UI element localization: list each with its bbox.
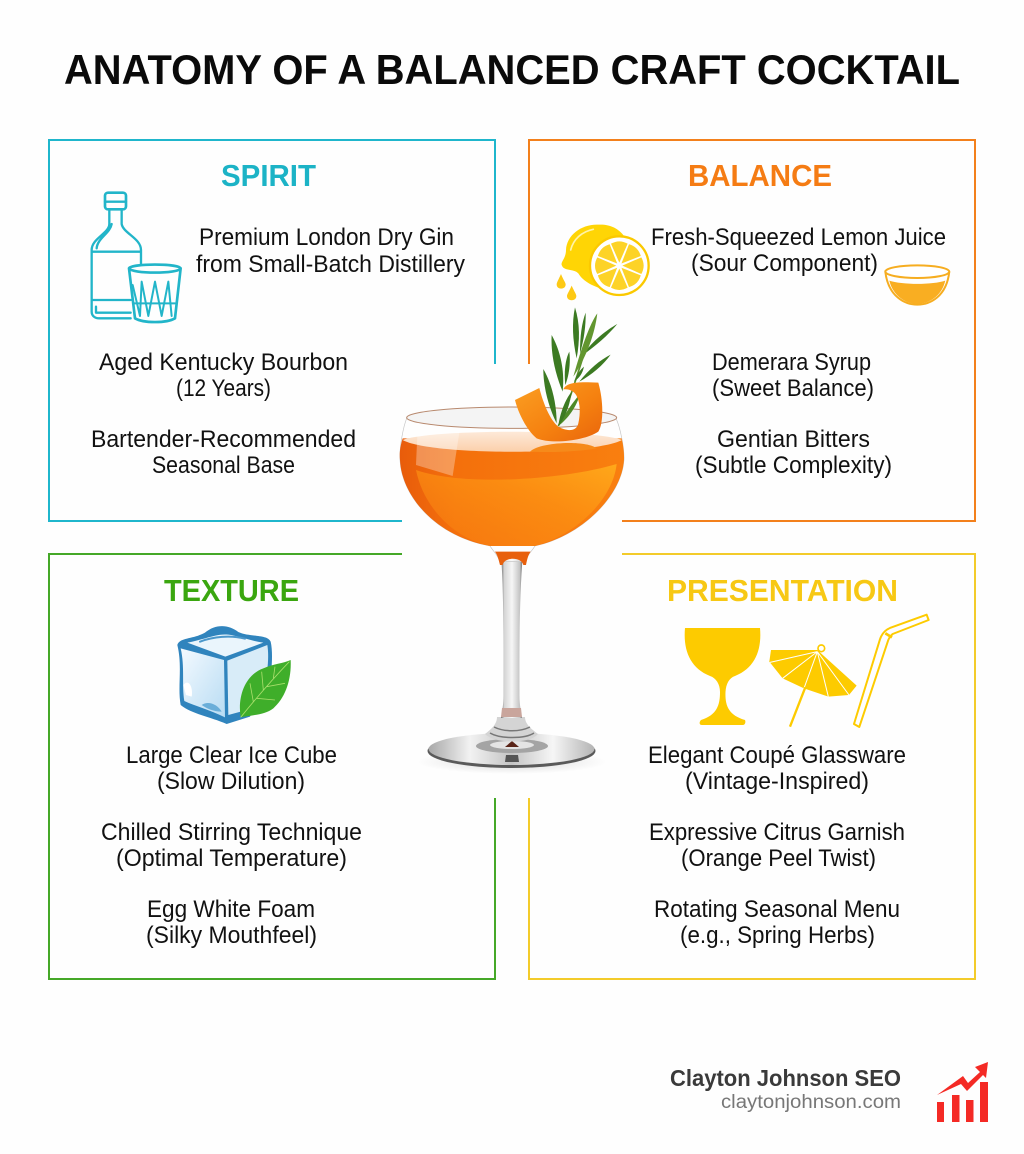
text: glassware [648,742,906,795]
icon: lemon [557,225,649,300]
text: bitters: (Subtle Complexity) [695,452,892,479]
text: seasonal menu: Rotating Seasonal Menu [654,896,900,923]
text: seasonal base: Bartender-Recommended [91,426,356,453]
text: bitters: Gentian Bitters [717,426,870,453]
icon: growth chart logo [937,1062,988,1122]
text: lemon juice: Fresh-Squeezed Lemon Juice [651,224,946,251]
glass bowl and liquid [400,407,624,565]
text: ice cube: Large Clear Ice Cube [126,742,337,769]
text: ice cube: (Slow Dilution) [157,768,305,795]
footer brand text: claytonjohnson.com [721,1092,901,1113]
garnish: orange peel twist [515,382,602,441]
text: seasonal menu: (e.g., Spring Herbs) [680,922,875,949]
text: lemon juice [651,224,946,277]
panel: balance [529,140,975,521]
text: syrup [712,349,874,402]
panel: presentation [529,554,975,979]
text: foam: Egg White Foam [147,896,315,923]
text: garnish: Expressive Citrus Garnish [649,819,905,846]
text: gin: from Small-Batch Distillery [196,251,465,278]
text: glassware: Elegant Coupé Glassware [648,742,906,769]
text: foam: (Silky Mouthfeel) [146,922,317,949]
title: ANATOMY OF A BALANCED CRAFT COCKTAIL [64,46,960,93]
footer brand text: Clayton Johnson SEO [670,1065,901,1091]
text: stirring: (Optimal Temperature) [116,845,347,872]
heading: presentation: PRESENTATION [667,573,898,608]
text: bitters [695,426,892,479]
central coupe cocktail [400,307,624,774]
garnish: rosemary sprig [543,307,617,426]
heading: texture: TEXTURE [164,573,299,608]
text: garnish: (Orange Peel Twist) [681,845,876,872]
glass foot and stem [417,553,607,774]
panel: spirit [49,140,495,521]
footer brand text [670,1065,901,1113]
text: garnish [649,819,905,872]
icon: bottle and glass [92,193,181,322]
text: seasonal menu [654,896,900,949]
text: syrup: Demerara Syrup [712,349,871,376]
text: gin: Premium London Dry Gin [199,224,454,251]
text: ice cube [126,742,337,795]
panel: texture [49,554,495,979]
text: lemon juice: (Sour Component) [691,250,878,277]
text: gin [196,224,465,278]
heading: balance: BALANCE [688,158,832,193]
text: bourbon [99,349,348,402]
text: stirring [101,819,362,872]
icon: bowl of juice [885,265,949,305]
text: bourbon: (12 Years) [176,375,271,402]
text: foam [146,896,317,949]
icon: bendy straw [854,615,929,727]
text: syrup: (Sweet Balance) [712,375,874,402]
text: seasonal base [91,426,356,479]
heading: spirit: SPIRIT [221,158,316,193]
text: seasonal base: Seasonal Base [152,452,295,479]
icon: coupe glass [685,628,760,725]
text: stirring: Chilled Stirring Technique [101,819,362,846]
icon: cocktail umbrella [769,645,857,727]
icon: ice cube and mint [177,626,291,724]
text: glassware: (Vintage-Inspired) [685,768,869,795]
text: bourbon: Aged Kentucky Bourbon [99,349,348,376]
